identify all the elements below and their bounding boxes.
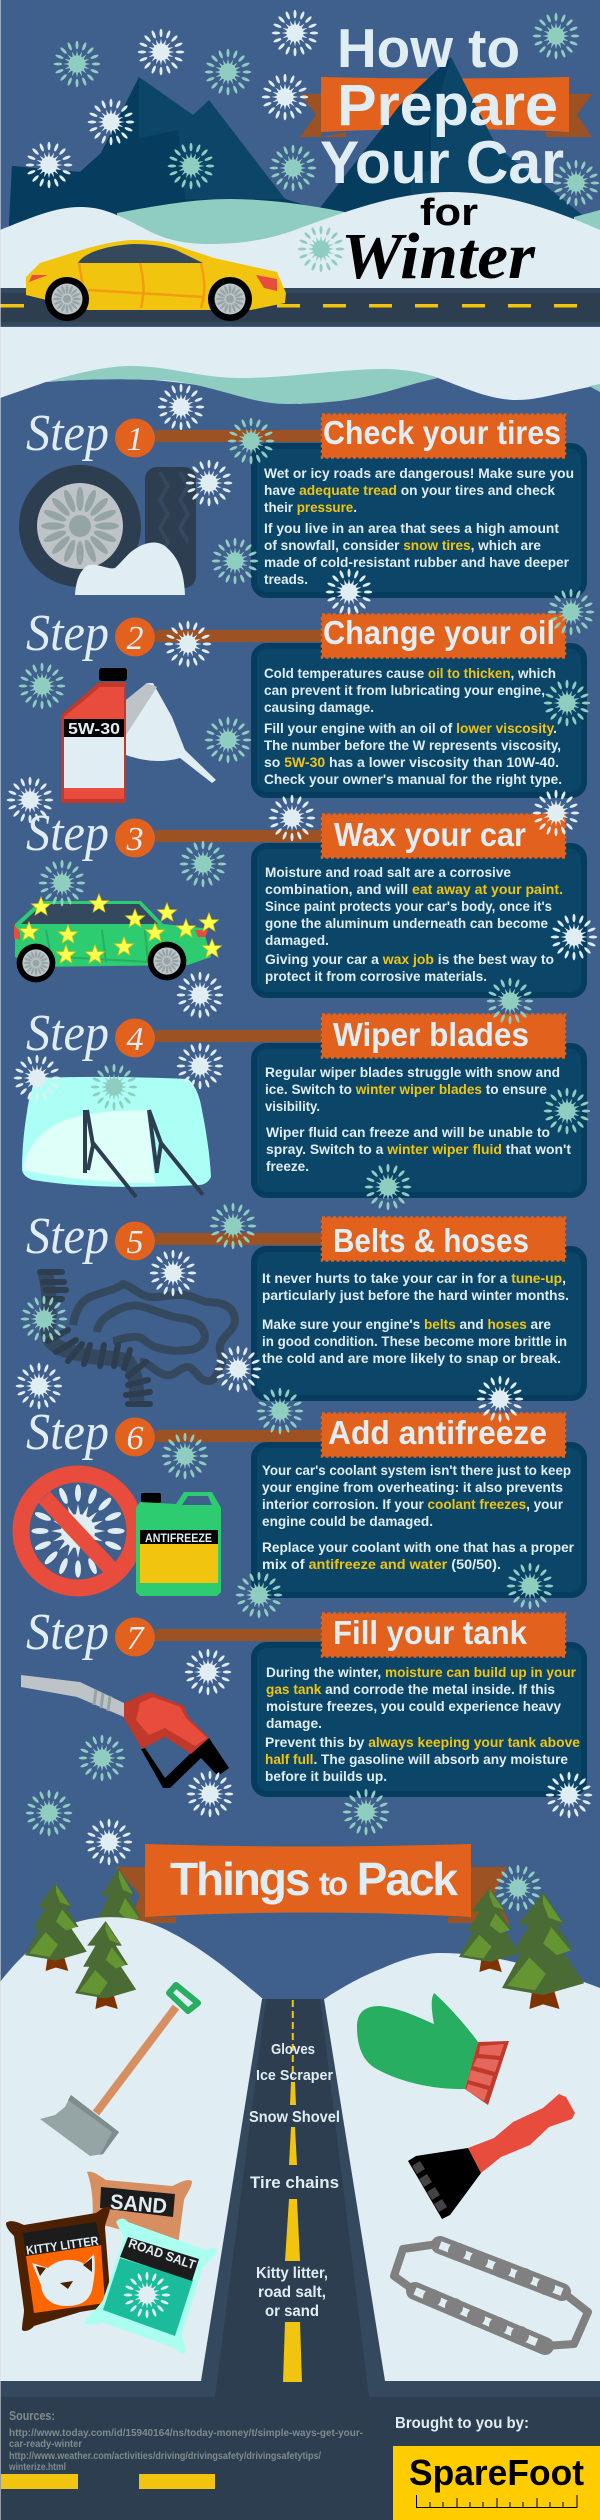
snowflakes — [6, 1193, 271, 1419]
icon: antifreeze jug: ANTIFREEZE — [145, 1531, 212, 1545]
step 3 — [14, 780, 600, 1028]
step 7 label — [26, 1604, 321, 1661]
body text: gone the aluminum underneath can become — [265, 916, 548, 931]
body text: gas tank and corrode the metal inside. If this — [266, 1682, 555, 1697]
road — [0, 1999, 600, 2520]
icon: windshield with wipers — [22, 1077, 211, 1197]
body text — [262, 1463, 575, 1572]
body text — [262, 1271, 569, 1366]
panel: fill your tank — [254, 1645, 584, 1794]
step 2 label: Step — [26, 605, 109, 662]
panel: wax your car — [254, 846, 584, 995]
step 4 label: Step — [26, 1005, 109, 1062]
list of items: Gloves — [271, 2041, 315, 2058]
body text: It never hurts to take your car in for a tune-up, — [262, 1271, 566, 1286]
body text: half full. The gasoline will absorb any moisture — [265, 1752, 568, 1767]
snowflakes — [29, 780, 600, 1028]
body text: your engine from overheating: it also prevents — [262, 1480, 563, 1495]
step 6 label: 6 — [126, 1420, 144, 1457]
body text: Regular wiper blades struggle with snow and — [265, 1065, 560, 1080]
step 5 label: Step — [26, 1208, 109, 1265]
body text: mix of antifreeze and water (50/50). — [262, 1557, 501, 1572]
body text: Moisture and road salt are a corrosive — [265, 865, 511, 880]
body text: made of cold-resistant rubber and have deeper — [264, 555, 570, 570]
icon: tire chains — [394, 2242, 588, 2346]
panel: check your tires — [254, 446, 584, 595]
icon: bag of kitty litter: KITTY LITTER — [25, 2234, 99, 2258]
list of items: Tire chains — [250, 2173, 339, 2192]
heading panel — [322, 814, 565, 858]
body text: Cold temperatures cause oil to thicken, which — [264, 666, 556, 681]
body text: damaged. — [265, 933, 329, 948]
heading: Check your tires — [323, 414, 561, 451]
step 7 — [16, 1604, 600, 1875]
list of items: Snow Shovel — [249, 2109, 340, 2126]
body text: During the winter, moisture can build up in your — [266, 1665, 577, 1680]
icon: oil bottle and funnel: 5W-30 — [68, 721, 120, 738]
step 1 label: Step — [26, 405, 109, 462]
list of items: or sand — [265, 2303, 319, 2320]
icon: bag of road salt — [84, 2219, 217, 2353]
body text: of snowfall, consider snow tires, which are — [264, 538, 541, 553]
list of items: Ice Scraper — [256, 2067, 333, 2084]
body text: can prevent it from lubricating your engine, — [264, 683, 545, 698]
title: Winter — [341, 220, 536, 293]
icon: ice scraper — [408, 2094, 575, 2219]
tree behind hill — [89, 1868, 149, 1968]
sources: winterize.html — [8, 2462, 66, 2473]
step 7 label: 7 — [126, 1620, 146, 1657]
step 2 label: 2 — [126, 620, 144, 657]
step 6 label — [26, 1404, 321, 1461]
body text: in good condition. These become more brittle in — [262, 1334, 567, 1349]
body text — [264, 466, 574, 587]
heading panel — [322, 1614, 565, 1656]
heading: Wax your car — [334, 816, 526, 853]
snow hills — [0, 192, 600, 300]
header snowflakes — [16, 0, 600, 440]
panel: change your oil — [254, 646, 584, 795]
body text: Prevent this by always keeping your tank above — [265, 1735, 580, 1750]
body text: interior corrosion. If your coolant freezes, your — [262, 1497, 564, 1512]
body text: ice. Switch to winter wiper blades to ensure — [265, 1082, 547, 1097]
title: for — [420, 192, 478, 234]
body text: damage. — [266, 1716, 322, 1731]
title — [320, 17, 564, 293]
step 4 label: 4 — [126, 1021, 144, 1058]
body text — [265, 865, 563, 984]
body text: so 5W-30 has a lower viscosity than 10W-40. — [264, 755, 559, 770]
step 1 label — [26, 405, 321, 462]
left edge line — [0, 0, 1, 2520]
road — [0, 288, 600, 326]
snowflakes — [152, 1366, 563, 1628]
icon: waxed green car — [14, 894, 222, 982]
sparefoot logo — [393, 2446, 600, 2520]
body text: particularly just before the hard winter months. — [262, 1288, 569, 1303]
icon: no freezing sign — [12, 1465, 144, 1597]
body text: have adequate tread on your tires and check — [264, 483, 556, 498]
icon: bag of road salt: ROAD SALT — [127, 2235, 198, 2272]
step 6 label: Step — [26, 1404, 109, 1461]
heading: Change your oil — [323, 614, 555, 651]
title ribbon — [300, 77, 592, 137]
step 4 label — [26, 1005, 321, 1062]
yellow car — [26, 240, 286, 321]
heading panel — [322, 1014, 565, 1058]
icon: bag of sand: SAND — [109, 2191, 168, 2218]
body text: the cold and are more likely to snap or break. — [262, 1351, 561, 1366]
title: Prepare — [337, 73, 558, 138]
body text: The number before the W represents viscosity, — [264, 738, 561, 753]
snowflakes — [16, 1639, 600, 1875]
body text: combination, and will eat away at your paint. — [265, 882, 563, 897]
list of items — [249, 2041, 340, 2320]
body text: causing damage. — [264, 700, 374, 715]
sources — [8, 2408, 363, 2473]
body text: Make sure your engine's belts and hoses are — [262, 1317, 551, 1332]
step 2 — [0, 579, 600, 833]
heading: Fill your tank — [333, 1614, 528, 1651]
title: Your Car — [320, 129, 564, 196]
icon: bag of kitty litter — [6, 2207, 111, 2331]
body text: visibility. — [265, 1099, 320, 1114]
body text: Wet or icy roads are dangerous! Make sure you — [264, 466, 574, 481]
body text: Since paint protects your car's body, once it's — [265, 899, 552, 914]
step 3 label: Step — [26, 805, 109, 862]
heading panel — [322, 1414, 565, 1456]
lower snow band — [0, 327, 600, 404]
step 3 label: 3 — [126, 821, 144, 858]
icon: bag of sand — [87, 2172, 192, 2245]
step 1 — [19, 405, 584, 625]
hero illustration — [0, 0, 600, 440]
snowflakes — [176, 408, 382, 625]
step 5 label — [26, 1208, 321, 1265]
road dashes — [1, 2474, 215, 2489]
mountains left — [7, 77, 360, 262]
ribbon: things to pack — [115, 1844, 510, 1923]
body text: Replace your coolant with one that has a proper — [262, 1540, 575, 1555]
body text: protect it from corrosive materials. — [265, 969, 487, 984]
body text — [264, 666, 562, 787]
body text: Giving your car a wax job is the best way to — [265, 952, 554, 967]
snow hills — [0, 1917, 600, 2381]
body text — [265, 1065, 572, 1174]
panel: belts and hoses — [254, 1249, 584, 1398]
sources: http://www.weather.com/activities/driving/drivingsafety/drivingsafetytips/ — [9, 2451, 321, 2462]
step 5 label: 5 — [126, 1224, 144, 1261]
heading: Wiper blades — [333, 1016, 529, 1053]
step 1 label: 1 — [126, 421, 144, 458]
body text: freeze. — [266, 1159, 309, 1174]
body text: Fill your engine with an oil of lower viscosity. — [264, 721, 557, 736]
panel: add antifreeze — [254, 1445, 584, 1595]
list of items: road salt, — [258, 2284, 326, 2301]
list of items: Kitty litter, — [256, 2265, 328, 2282]
step 4 — [4, 968, 600, 1220]
body text: If you live in an area that sees a high amount — [264, 521, 560, 536]
body text: engine could be damaged. — [262, 1514, 433, 1529]
body text: before it builds up. — [265, 1769, 387, 1784]
icon: tire — [19, 465, 196, 595]
title: How to — [337, 17, 520, 79]
body text: spray. Switch to a winter wiper fluid that won't — [266, 1142, 572, 1157]
panel: wiper blades — [254, 1046, 584, 1195]
body text: their pressure. — [264, 500, 357, 515]
body text: Wiper fluid can freeze and will be unable to — [266, 1125, 550, 1140]
snowflakes — [0, 579, 600, 833]
ribbon: things to pack: Things to Pack — [170, 1853, 458, 1905]
road center line — [283, 2000, 302, 2382]
step 7 label: Step — [26, 1604, 109, 1661]
step 3 label — [26, 805, 321, 862]
heading panel — [322, 414, 565, 458]
icon: snow shovel — [40, 1985, 198, 2156]
brought to you by: Brought to you by: — [395, 2415, 529, 2432]
sources: car-ready-winter — [9, 2439, 82, 2450]
step 6 — [12, 1366, 584, 1628]
icon: mitten — [357, 1993, 509, 2105]
snowflakes — [4, 968, 600, 1220]
body text: Your car's coolant system isn't there just to keep — [262, 1463, 571, 1478]
mountain right — [320, 57, 600, 240]
body text: moisture freezes, you could experience heavy — [266, 1699, 561, 1714]
heading panel — [322, 614, 565, 658]
heading panel — [322, 1218, 565, 1260]
sparefoot logo: SpareFoot — [409, 2452, 584, 2493]
icon: belts and hoses — [40, 1272, 235, 1404]
snowflake — [485, 1855, 551, 1921]
body text: treads. — [264, 572, 308, 587]
sources: Sources: — [9, 2408, 55, 2423]
icon: antifreeze jug — [136, 1492, 221, 1596]
body text — [265, 1665, 580, 1784]
step 5 — [6, 1193, 584, 1419]
things to pack scene — [0, 1844, 600, 2520]
body text: Check your owner's manual for the right type. — [264, 772, 562, 787]
step 2 label — [26, 605, 321, 662]
icon: oil bottle and funnel — [61, 668, 216, 803]
trees on hills — [25, 1883, 584, 2009]
heading: Add antifreeze — [328, 1414, 547, 1451]
footer — [1, 2408, 600, 2520]
heading: Belts & hoses — [333, 1222, 529, 1259]
sources: http://www.today.com/id/15940164/ns/today-money/t/simple-ways-get-your- — [9, 2428, 363, 2439]
icon: fuel nozzle — [21, 1675, 229, 1788]
